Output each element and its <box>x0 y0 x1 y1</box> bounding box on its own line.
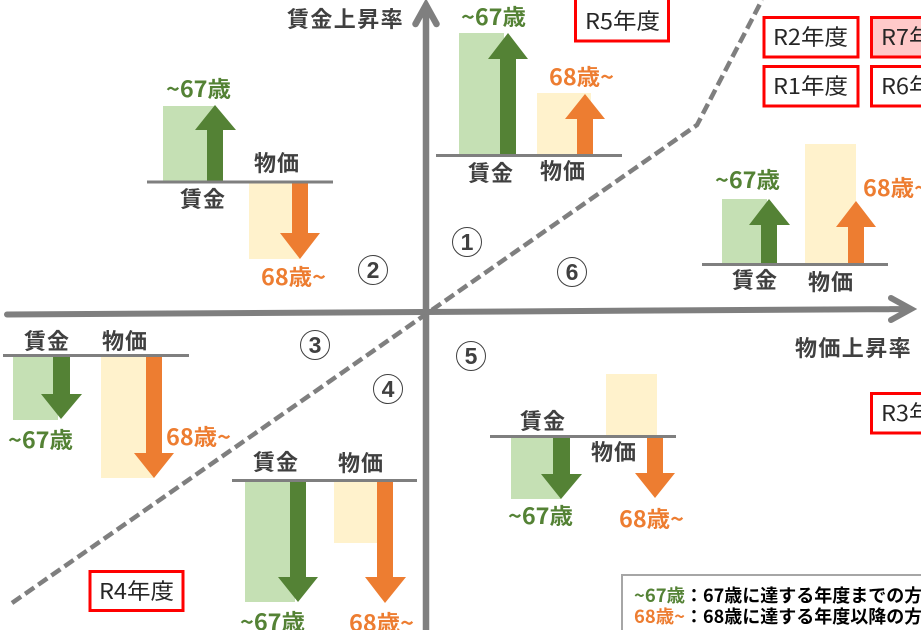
baseline <box>147 180 333 184</box>
wage bar <box>511 437 561 499</box>
panel: case 3 <box>3 324 231 478</box>
label under 67: ~67歳 <box>461 0 526 32</box>
legend row 2: 68歳~ <box>634 603 685 629</box>
horizontal axis label: 物価上昇率 <box>795 331 912 363</box>
wage label: 賃金 <box>253 445 299 477</box>
legend row 1: ：67歳に達する年度までの方 <box>685 582 921 608</box>
year tag R6 <box>872 66 921 106</box>
marker 1: 1 <box>461 229 474 255</box>
wage bar <box>459 33 504 155</box>
dashed boundary line <box>12 0 762 603</box>
vertical axis label: 賃金上昇率 <box>287 2 404 34</box>
price arrow <box>134 356 174 478</box>
wage label: 賃金 <box>732 263 778 295</box>
marker 4: 4 <box>382 376 395 402</box>
legend row 2: ：68歳に達する年度以降の方 <box>685 603 921 629</box>
wage arrow <box>541 437 582 499</box>
wage bar <box>245 481 295 602</box>
year tag R5: R5年度 <box>585 4 660 36</box>
wage arrow <box>195 105 236 182</box>
wage arrow <box>488 33 528 155</box>
year tag R1: R1年度 <box>773 69 848 101</box>
panel: case 2 <box>147 72 333 292</box>
baseline <box>3 354 189 357</box>
marker 5 <box>456 342 486 370</box>
year tag R4: R4年度 <box>99 574 174 606</box>
marker 5: 5 <box>465 343 478 369</box>
marker 2 <box>358 256 388 284</box>
under 67 label: ~67歳 <box>166 72 231 104</box>
price bar <box>606 374 657 436</box>
price label: 物価 <box>254 146 300 178</box>
under 67 label: ~67歳 <box>8 423 73 455</box>
legend <box>622 575 921 630</box>
baseline <box>436 154 622 157</box>
under 67 label: ~67歳 <box>508 499 573 531</box>
price label: 物価 <box>338 446 384 478</box>
marker 6 <box>558 258 586 286</box>
panel: case 4 <box>232 445 417 630</box>
wage label: 賃金 <box>180 182 226 214</box>
wage bar <box>163 106 215 182</box>
year tag R1 <box>764 66 858 106</box>
year tag R2 <box>764 18 858 57</box>
price bar <box>537 93 591 155</box>
wage label: 賃金 <box>24 324 70 356</box>
68 label: 68歳~ <box>619 502 684 534</box>
wage arrow <box>278 481 318 602</box>
price bar <box>101 356 154 478</box>
price bar <box>805 144 856 264</box>
price arrow <box>280 182 320 259</box>
wage bar <box>13 356 58 420</box>
wage arrow <box>749 199 790 264</box>
year tag R2: R2年度 <box>773 20 848 52</box>
price arrow <box>365 481 406 603</box>
label over 68: 68歳~ <box>549 60 614 92</box>
68 label: 68歳~ <box>261 260 326 292</box>
marker 6: 6 <box>566 259 578 285</box>
baseline <box>490 435 676 438</box>
price arrow <box>635 437 675 498</box>
baseline <box>702 263 888 266</box>
price label: 物価 <box>808 265 854 297</box>
price label: 物価 <box>591 435 637 467</box>
price arrow <box>836 201 876 264</box>
price bar <box>249 182 300 259</box>
marker 4 <box>374 374 402 404</box>
price bar <box>334 481 382 543</box>
marker 2: 2 <box>367 257 379 283</box>
marker 3: 3 <box>309 332 321 358</box>
year tag R5 <box>576 0 668 41</box>
panel: case 1 <box>436 0 622 188</box>
wage bar <box>722 199 767 264</box>
legend row 1: ~67歳 <box>634 582 685 608</box>
marker 1 <box>452 228 482 256</box>
wage label: 賃金 <box>520 404 566 436</box>
price arrow <box>565 94 605 155</box>
wage arrow <box>41 356 82 419</box>
year tag R4 <box>90 572 183 610</box>
wage label: 賃金 <box>468 156 514 188</box>
68 label: 68歳~ <box>166 420 231 452</box>
marker 3 <box>300 330 330 360</box>
under 67 label: ~67歳 <box>715 163 780 195</box>
baseline <box>232 479 417 482</box>
price label: 物価 <box>540 154 586 186</box>
horizontal axis arrow <box>7 298 911 320</box>
year tag R3 <box>872 394 921 433</box>
price label: 物価 <box>102 324 148 356</box>
vertical axis arrow <box>416 5 436 630</box>
year tag R7 <box>872 18 921 57</box>
panel: case 6 <box>702 144 921 297</box>
panel: case 5 <box>490 374 684 534</box>
